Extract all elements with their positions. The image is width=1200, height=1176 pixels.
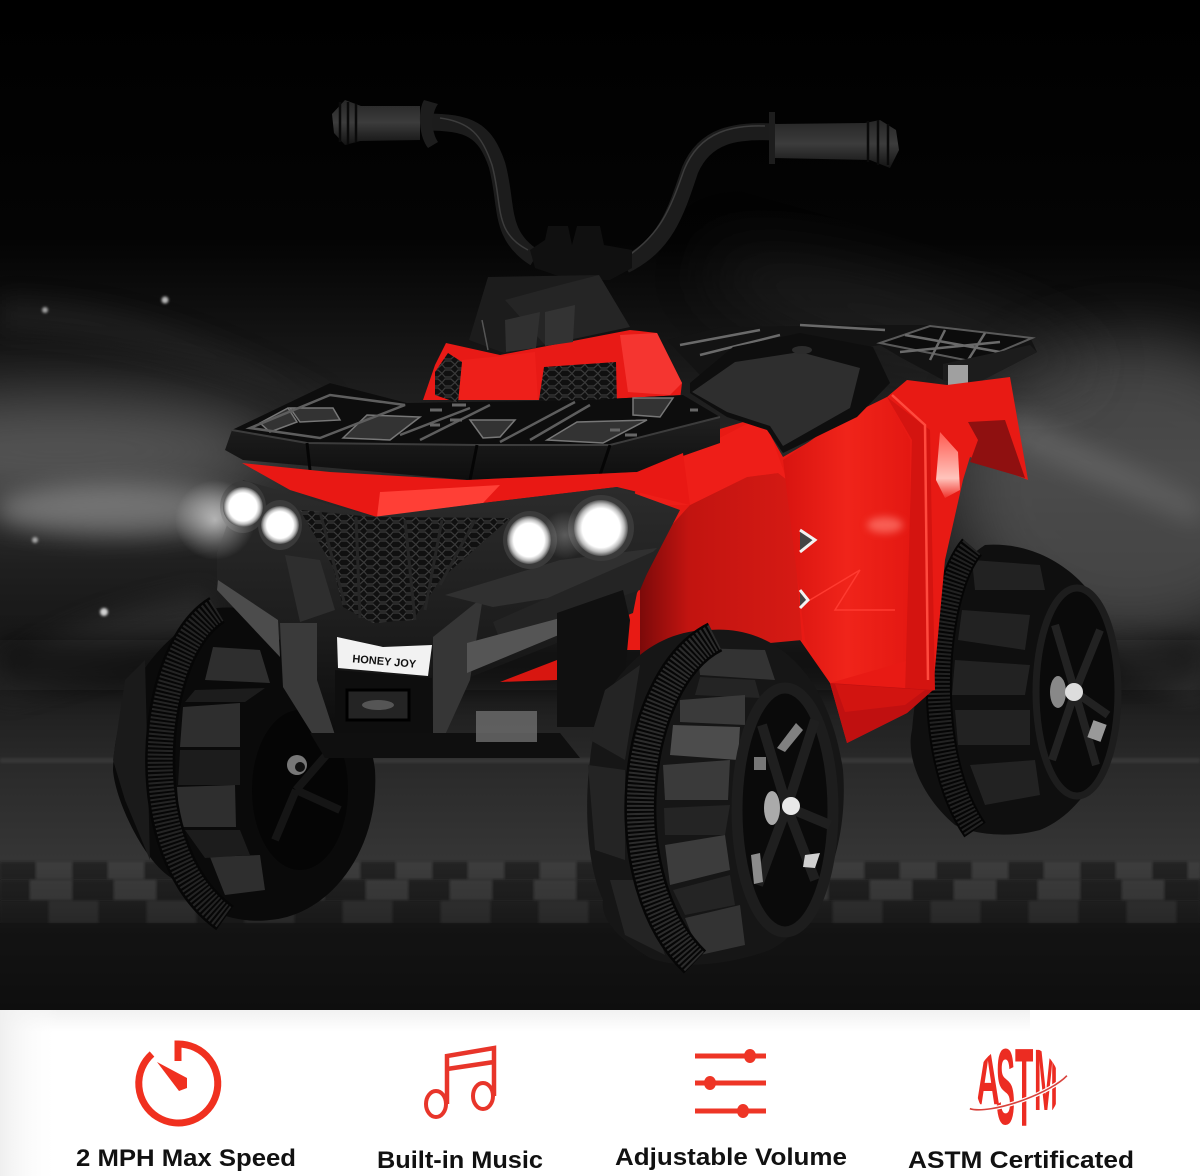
icon: speedometer <box>139 1044 218 1123</box>
icon: ASTM logo: T <box>1015 1026 1033 1151</box>
label: ASTM: ASTM Certificated <box>908 1147 1134 1174</box>
label: max speed: 2 MPH Max Speed <box>76 1145 296 1172</box>
instrument pod <box>469 275 630 353</box>
dash cowl <box>423 330 682 407</box>
front right wheel <box>587 630 844 965</box>
rear rack <box>667 325 1037 385</box>
icon: music note <box>426 1048 494 1117</box>
number plate: HONEY JOY <box>352 653 417 671</box>
lower bumper <box>310 670 580 758</box>
ATV red body <box>600 377 1028 743</box>
icon: ASTM logo: S <box>996 1027 1015 1147</box>
bottom white feature band <box>0 1010 1200 1176</box>
headlights <box>175 480 634 569</box>
icon: ASTM logo: A <box>976 1038 1000 1121</box>
rear wheel <box>911 545 1119 835</box>
front rack <box>225 383 720 480</box>
seat <box>690 333 890 453</box>
label: music: Built-in Music <box>377 1147 543 1174</box>
number plate <box>337 637 432 676</box>
icon: volume sliders <box>695 1049 766 1118</box>
front left wheel <box>113 608 375 921</box>
icon: ASTM logo: M <box>1034 1031 1058 1129</box>
label: volume: Adjustable Volume <box>615 1144 847 1171</box>
icon: ASTM logo <box>970 1048 1068 1126</box>
black front fascia <box>217 480 680 735</box>
handlebars <box>332 100 899 280</box>
grille <box>300 510 510 623</box>
red fascia <box>242 453 690 517</box>
